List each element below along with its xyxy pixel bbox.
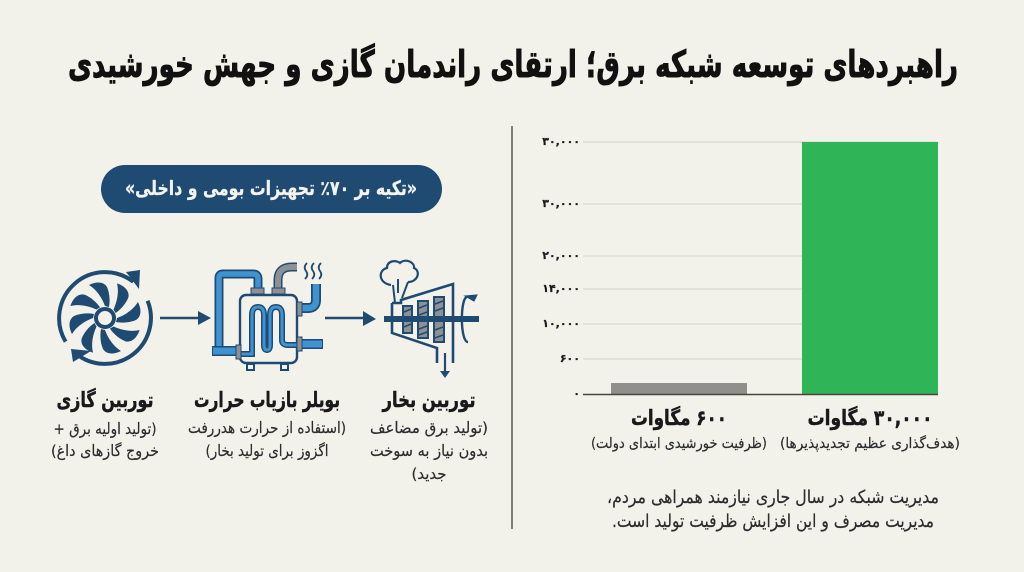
text block: heat recovery boiler: بویلر بازیاب حرارت <box>194 388 340 412</box>
text block: heat recovery boiler <box>188 388 346 461</box>
y axis labels: ۲۰,۰۰۰ <box>542 249 580 262</box>
text block: heat recovery boiler: (استفاده از حرارت هدررفت <box>188 419 346 437</box>
callout text <box>607 487 939 532</box>
callout text: مدیریت شبکه در سال جاری نیازمند همراهی مردم، <box>607 487 939 508</box>
callout text: مدیریت مصرف و این افزایش ظرفیت تولید است. <box>612 511 934 532</box>
text block: steam turbine: (تولید برق مضاعف <box>370 419 488 437</box>
text block: steam turbine: بدون نیاز به سوخت <box>370 442 488 461</box>
icon: gas turbine <box>59 270 151 364</box>
label: 600 MW: ۶۰۰ مگاوات <box>631 405 727 430</box>
text block: steam turbine <box>370 388 488 483</box>
y axis labels: ۰ <box>573 387 580 400</box>
label: 30,000 MW <box>780 405 960 452</box>
label: 30,000 MW: ۳۰,۰۰۰ مگاوات <box>808 405 932 430</box>
arrow: boiler to steam turbine <box>325 311 376 326</box>
arrow: turbine to boiler <box>160 311 211 325</box>
label: 600 MW <box>591 405 767 452</box>
label: 600 MW: (ظرفیت خورشیدی ابتدای دولت) <box>591 436 767 452</box>
y axis labels: ۳۰,۰۰۰ <box>542 197 580 210</box>
text block: gas turbine: خروج گازهای داغ) <box>51 442 159 461</box>
y axis labels <box>542 135 580 400</box>
icon: heat recovery boiler <box>212 263 323 370</box>
y axis labels: ۳۰,۰۰۰ <box>542 135 580 148</box>
icon: steam turbine <box>381 261 479 378</box>
vertical divider <box>511 126 513 529</box>
text block: gas turbine <box>51 387 159 461</box>
bar chart <box>542 135 938 400</box>
panel: domestic equipment badge <box>101 165 442 213</box>
label: 30,000 MW: (هدف‌گذاری عظیم تجدیدپذیرها) <box>780 435 960 452</box>
text block: steam turbine: توربین بخار <box>382 388 476 412</box>
text block: heat recovery boiler: اگزوز برای تولید بخار) <box>206 442 328 461</box>
text block: steam turbine: جدید) <box>412 465 446 483</box>
text block: gas turbine: توربین گازی <box>56 387 154 412</box>
text block: gas turbine: (تولید اولیه برق + <box>54 420 156 439</box>
panel: domestic equipment badge: «تکیه بر ۷۰٪ تجهیزات بومی و داخلی» <box>125 176 417 200</box>
y axis labels: ۱۴,۰۰۰ <box>542 282 580 295</box>
y axis labels: ۶۰۰ <box>560 352 580 365</box>
y axis labels: ۱۰,۰۰۰ <box>542 317 580 330</box>
